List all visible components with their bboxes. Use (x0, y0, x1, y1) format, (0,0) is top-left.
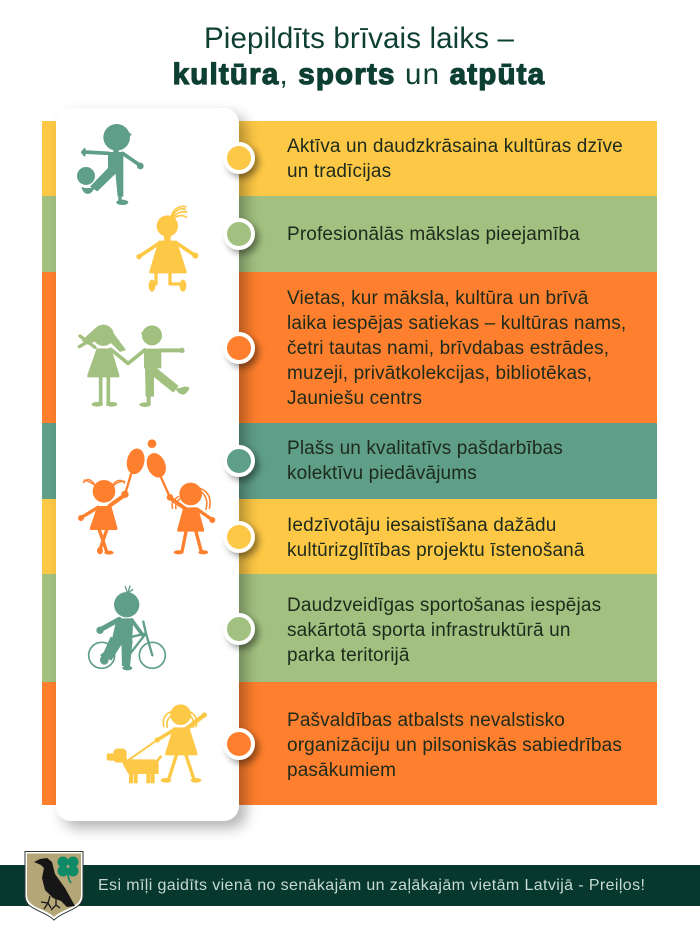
text: culture life: Aktīva un daudzkrāsaina kultūras dzīve (287, 136, 623, 157)
text: municipal support: organizāciju un pilsoniskās sabiedrības (287, 735, 622, 756)
text: municipal support: pasākumiem (287, 760, 396, 781)
footer band (0, 865, 700, 906)
figure: two girls with rackets (78, 439, 215, 555)
text: amateur groups: Plašs un kvalitatīvs pašdarbības (287, 438, 563, 459)
timeline dots (223, 142, 263, 768)
text: municipal support (287, 710, 622, 781)
text: culture life (287, 136, 623, 182)
text: municipal support: Pašvaldības atbalsts nevalstisko (287, 710, 565, 731)
figure: boy kicking ball (77, 124, 144, 205)
figure: girl and boy holding hands (79, 325, 189, 407)
figure: girl walking dog (107, 704, 207, 783)
dot: orange (223, 728, 255, 760)
dot: teal (223, 445, 255, 477)
dot: green (223, 613, 255, 645)
white figures panel (56, 108, 239, 821)
title: kultūra, sports un atpūta (173, 58, 545, 91)
text: residents: Iedzīvotāju iesaistīšana dažādu (287, 515, 556, 536)
icon: coat of arms (24, 851, 84, 921)
dot: yellow (223, 521, 255, 553)
text: sports: sakārtotā sporta infrastruktūrā un (287, 620, 571, 641)
dot: yellow (223, 142, 255, 174)
text: venues: muzeji, privātkolekcijas, bibliotēkas, (287, 363, 592, 384)
figure: boy with bicycle (89, 586, 165, 670)
text: sports: Daudzveidīgas sportošanas iespējas (287, 595, 601, 616)
text: sports (287, 595, 601, 666)
figure: sitting girl (136, 206, 198, 292)
text: venues: Jauniešu centrs (287, 388, 422, 409)
text: sports: parka teritorijā (287, 645, 410, 666)
text: venues: četri tautas nami, brīvdabas estrādes, (287, 338, 609, 359)
footer text: Esi mīļi gaidīts vienā no senākajām un zaļākajām vietām Latvijā - Preiļos! (98, 877, 645, 894)
text: venues: laika iespējas satiekas – kultūras nams, (287, 313, 626, 334)
text: culture life: un tradīcijas (287, 161, 391, 182)
text: amateur groups: kolektīvu piedāvājums (287, 463, 477, 484)
title: Piepildīts brīvais laiks – (204, 22, 514, 55)
text: residents: kultūrizglītības projektu īstenošanā (287, 540, 585, 561)
text: venues (287, 288, 626, 409)
text: amateur groups (287, 438, 563, 484)
title (173, 22, 545, 91)
dot: orange (223, 332, 255, 364)
text: venues: Vietas, kur māksla, kultūra un brīvā (287, 288, 588, 309)
dot: green (223, 218, 255, 250)
colour bands (42, 121, 657, 805)
text: residents (287, 515, 585, 561)
text: professional art: Profesionālās mākslas pieejamība (287, 224, 580, 245)
